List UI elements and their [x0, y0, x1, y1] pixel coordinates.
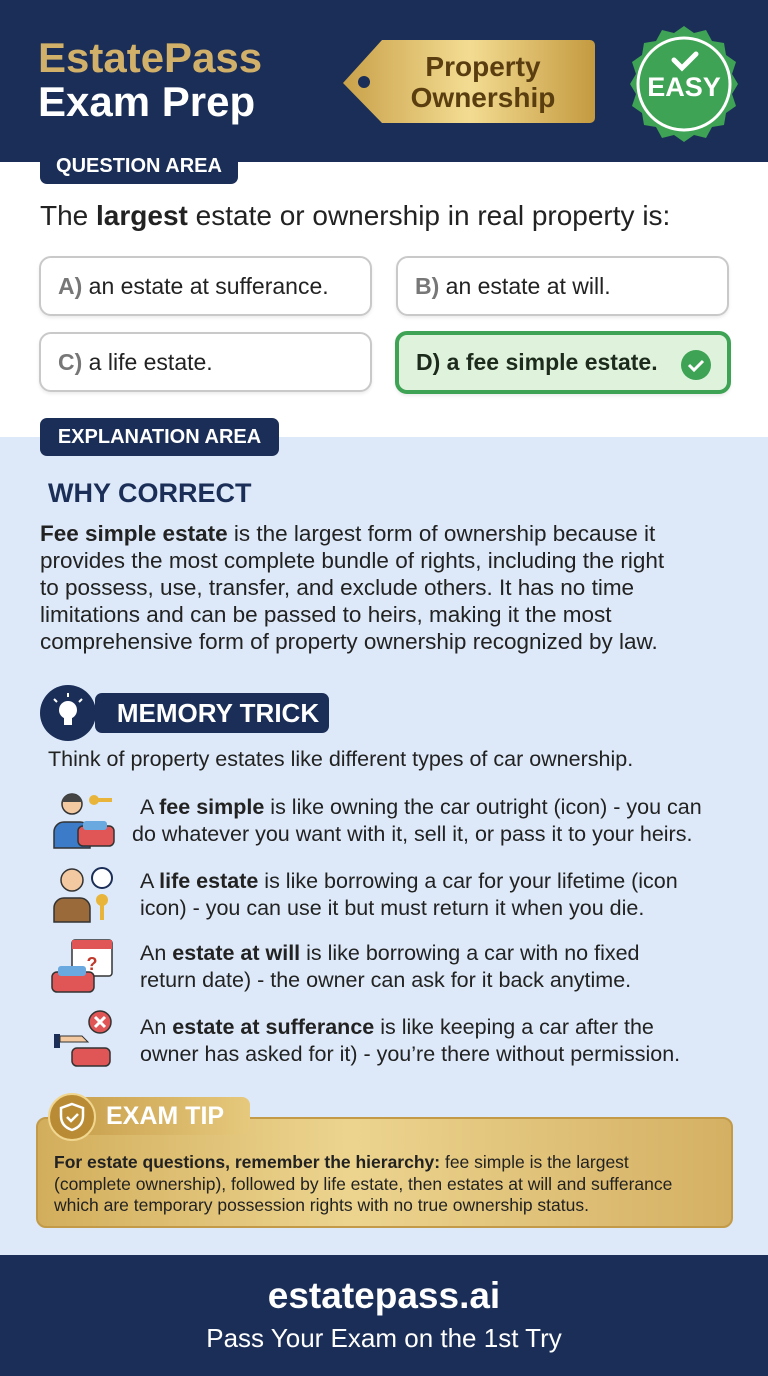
- option D correct: [395, 331, 731, 394]
- badge: question area: QUESTION AREA: [56, 154, 222, 176]
- why correct text: limitations and can be passed to heirs, making it the most: [40, 602, 612, 627]
- item: estate at will: [51, 939, 640, 993]
- badge: EASY: [630, 26, 738, 142]
- option C: [39, 332, 372, 392]
- item: fee simple: do whatever you want with it, sell it, or pass it to your heirs.: [132, 822, 692, 846]
- footer url: estatepass.ai: [268, 1275, 500, 1316]
- option B: B) an estate at will.: [415, 272, 611, 298]
- why correct text: provides the most complete bundle of rights, including the right: [40, 548, 664, 573]
- tag: Property Ownership: Ownership: [411, 82, 555, 113]
- option A: A) an estate at sufferance.: [58, 272, 329, 298]
- why correct text: [40, 521, 664, 654]
- tag: Property Ownership: Property: [425, 51, 541, 82]
- icon: car with calendar: [51, 939, 113, 993]
- icon: check: [681, 350, 711, 380]
- memory trick heading: MEMORY TRICK: [117, 698, 319, 728]
- item: estate at will: return date) - the owner can ask for it back anytime.: [140, 968, 631, 992]
- brand title: Exam Prep: [38, 78, 255, 125]
- badge: question area: [40, 148, 238, 184]
- option B: [396, 256, 729, 316]
- exam tip box: [36, 1117, 733, 1228]
- memory intro: Think of property estates like different types of car ownership.: [48, 747, 633, 771]
- item: life estate: [53, 867, 678, 923]
- badge: explanation area: [40, 418, 279, 456]
- exam tip text: [54, 1152, 672, 1215]
- item: life estate: icon) - you can use it but must return it when you die.: [140, 896, 644, 920]
- footer: [0, 1255, 768, 1376]
- icon: bulb: [40, 685, 95, 741]
- option A: [39, 256, 372, 316]
- badge: EASY: EASY: [647, 72, 721, 102]
- item: estate at sufferance: An estate at sufferance is like keeping a car after the: [140, 1015, 654, 1039]
- icon: old man: [53, 867, 113, 923]
- item: estate at sufferance: [54, 1010, 680, 1067]
- explanation panel: [0, 437, 768, 1255]
- exam tip badge: [48, 1093, 250, 1141]
- memory trick heading: [40, 685, 329, 741]
- exam tip text: (complete ownership), followed by life estate, then estates at will and sufferance: [54, 1174, 672, 1194]
- header: [0, 0, 768, 162]
- item: fee simple: [53, 793, 702, 849]
- brand title: EstatePass: [38, 34, 262, 81]
- icon: hand on car: [54, 1010, 112, 1067]
- why correct text: Fee simple estate is the largest form of ownership because it: [40, 521, 655, 546]
- badge: explanation area: EXPLANATION AREA: [58, 426, 261, 448]
- exam tip text: For estate questions, remember the hierarchy: fee simple is the largest: [54, 1152, 629, 1172]
- why correct text: to possess, use, transfer, and exclude others. It has no time: [40, 575, 634, 600]
- option C: C) a life estate.: [58, 348, 213, 374]
- item: estate at will: An estate at will is like borrowing a car with no fixed: [140, 941, 640, 965]
- icon: car with calendar: ?: [86, 954, 98, 974]
- icon: man with car: [53, 793, 115, 849]
- option D correct: D) a fee simple estate.: [416, 349, 658, 375]
- footer tagline: Pass Your Exam on the 1st Try: [206, 1323, 562, 1353]
- icon: shield: [48, 1093, 96, 1141]
- item: fee simple: A fee simple is like owning the car outright (icon) - you can: [140, 795, 702, 819]
- why correct heading: WHY CORRECT: [48, 478, 252, 508]
- exam tip badge: EXAM TIP: [106, 1102, 224, 1130]
- tag: Property Ownership: [343, 40, 595, 123]
- brand title: [38, 34, 262, 125]
- why correct text: comprehensive form of property ownership recognized by law.: [40, 629, 658, 654]
- question text: The largest estate or ownership in real property is:: [40, 200, 670, 231]
- item: life estate: A life estate is like borrowing a car for your lifetime (icon: [140, 869, 678, 893]
- item: estate at sufferance: owner has asked for it) - you’re there without permission.: [140, 1042, 680, 1066]
- exam tip text: which are temporary possession rights with no true ownership status.: [54, 1195, 589, 1215]
